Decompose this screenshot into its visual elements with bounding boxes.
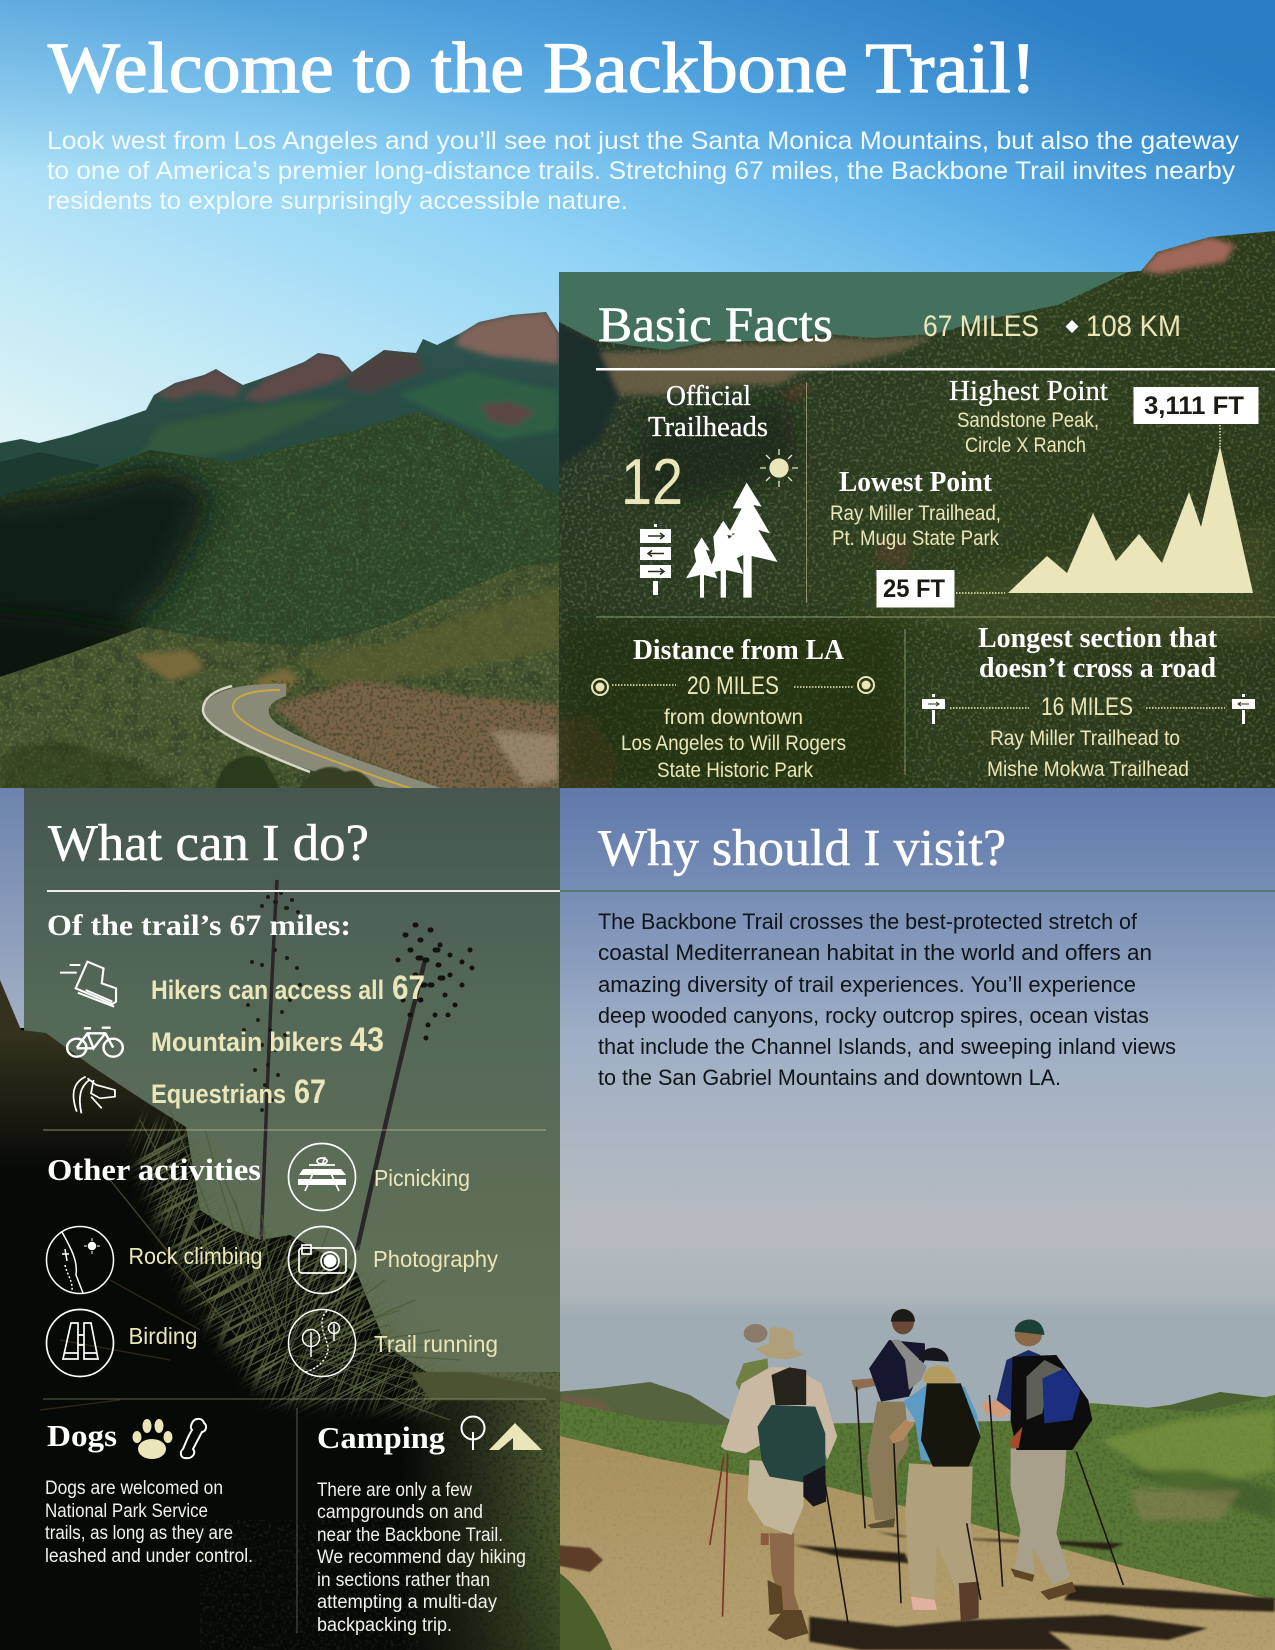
official trailheads: 12 <box>621 445 683 518</box>
hiker 2 <box>867 1402 909 1520</box>
panel: basic facts <box>555 231 1275 791</box>
activity: trail running: Trail running <box>374 1331 498 1357</box>
label: 3,111 ft: 3,111 FT <box>1144 392 1244 420</box>
bottom right grass <box>417 1372 560 1650</box>
icon: bicycle <box>67 1028 123 1057</box>
icon: hiking boot <box>60 962 116 1007</box>
photo: mountain behind facts <box>555 231 1275 791</box>
icon: trail signs <box>640 524 671 595</box>
icon: picnic table <box>288 1144 356 1210</box>
stat: equestrians: Equestrians <box>151 1079 286 1109</box>
elevation chart <box>1008 425 1253 593</box>
stat: length: 67 MILES <box>923 310 1039 343</box>
activity: rock climbing: Rock climbing <box>128 1243 262 1269</box>
photo: mountain and road <box>0 312 559 795</box>
shadows <box>793 1532 1275 1650</box>
stat: length: 108 KM <box>1086 310 1181 343</box>
lowest point: Pt. Mugu State Park <box>832 527 999 550</box>
hiker 1 <box>770 1533 799 1610</box>
subheading: miles: Of the trail’s 67 miles: <box>47 909 351 942</box>
official trailheads: Official <box>666 381 751 412</box>
stat: mountain bikers: Mountain bikers <box>151 1027 343 1057</box>
vertical divider <box>904 629 906 775</box>
distant hill <box>410 1372 560 1400</box>
stat: hikers: 67 <box>392 969 425 1007</box>
distance from LA: from downtown <box>664 706 803 729</box>
icon: sun <box>760 449 798 487</box>
camping section: campgrounds on and <box>317 1502 483 1523</box>
trekking poles <box>825 1387 1123 1623</box>
camping section: Camping <box>317 1420 446 1455</box>
intro paragraph <box>47 127 1240 215</box>
panel: why should I visit <box>560 820 1275 1090</box>
stat: length <box>923 310 1181 343</box>
longest section: doesn’t cross a road <box>979 653 1216 684</box>
icon: right sign <box>1232 694 1255 724</box>
activity: trail running <box>288 1310 498 1376</box>
camping section: near the Backbone Trail. <box>317 1525 503 1546</box>
longest section <box>922 623 1255 781</box>
panel: what can I do <box>0 788 560 1650</box>
faint dark grass speckle <box>200 1520 420 1650</box>
activity: picnicking: Picnicking <box>374 1165 470 1191</box>
panel background: teal sky band <box>559 272 1275 392</box>
divider <box>43 1398 546 1400</box>
icon: trail and trees <box>288 1310 356 1376</box>
activity: photography: Photography <box>373 1246 498 1272</box>
longest section: Mishe Mokwa Trailhead <box>987 758 1189 781</box>
section divider <box>596 616 1275 618</box>
intro paragraph: residents to explore surprisingly accessible nature. <box>47 187 628 215</box>
panel background <box>24 788 560 1650</box>
divider <box>43 1130 546 1131</box>
icon: horse head <box>73 1077 115 1113</box>
icon: paw <box>132 1419 172 1459</box>
activity: birding <box>46 1310 198 1376</box>
intro paragraph: to one of America’s premier long-distance trails. Stretching 67 miles, the Backbone Trail invites nearby <box>47 157 1236 185</box>
hiker: back small <box>736 1358 770 1395</box>
lowest point: Ray Miller Trailhead, <box>830 502 1001 525</box>
camping section <box>317 1416 542 1636</box>
heading: basic facts: Basic Facts <box>598 296 833 352</box>
stat: hikers: Hikers can access all <box>151 975 384 1005</box>
label: 25 ft: 25 FT <box>883 575 945 603</box>
stat: equestrians <box>73 1073 326 1113</box>
body text: deep wooded canyons, rocky outcrop spires, ocean vistas <box>598 1003 1149 1028</box>
icon: rock climber <box>46 1226 114 1294</box>
header rule <box>596 368 1275 370</box>
camping section: backpacking trip. <box>317 1615 452 1636</box>
distance from LA: Los Angeles to Will Rogers <box>621 732 846 755</box>
body text: coastal Mediterranean habitat in the world and offers an <box>598 940 1152 965</box>
icon: binoculars <box>46 1310 114 1376</box>
activity: picnicking <box>288 1144 470 1210</box>
header rule <box>47 890 560 892</box>
icon: tree <box>462 1416 484 1450</box>
dogs section: trails, as long as they are <box>45 1523 233 1544</box>
stat: mountain bikers: 43 <box>350 1021 384 1059</box>
grass blades <box>40 1110 460 1420</box>
camping section: in sections rather than <box>317 1570 490 1591</box>
icon: left sign <box>922 694 945 724</box>
dogs section: National Park Service <box>45 1501 208 1522</box>
bush silhouette <box>0 980 560 1650</box>
distance from LA <box>592 635 874 782</box>
photo: hikers background <box>555 788 1275 1650</box>
lowest point <box>830 467 1001 550</box>
stat: mountain bikers <box>67 1021 384 1059</box>
body text: to the San Gabriel Mountains and downtown LA. <box>598 1065 1061 1090</box>
activity: rock climbing <box>46 1226 262 1294</box>
highest point <box>949 376 1108 457</box>
hiker 3 <box>905 1463 979 1600</box>
title: Welcome to the Backbone Trail! <box>48 28 1036 108</box>
camping section: We recommend day hiking <box>317 1547 526 1568</box>
icon: end target <box>858 677 874 693</box>
icon: start target <box>592 679 608 695</box>
label: 3,111 ft <box>1134 387 1258 424</box>
icon: camera <box>288 1226 356 1294</box>
official trailheads: Trailheads <box>648 412 768 443</box>
illustration: hikers <box>710 1309 1275 1650</box>
distance from LA: State Historic Park <box>657 759 813 782</box>
stat: hikers <box>60 962 425 1007</box>
icon: pine trees <box>686 483 778 598</box>
longest section: Ray Miller Trailhead to <box>990 727 1180 750</box>
vertical divider <box>296 1408 298 1633</box>
activity: photography <box>288 1226 498 1294</box>
sky background <box>0 0 1275 790</box>
body text: amazing diversity of trail experiences. You’ll experience <box>598 972 1136 997</box>
distance from LA: Distance from LA <box>633 635 845 666</box>
body text: The Backbone Trail crosses the best-protected stretch of <box>598 909 1138 934</box>
heading: why should I visit: Why should I visit? <box>598 820 1006 877</box>
stat: equestrians: 67 <box>294 1073 326 1111</box>
vertical divider <box>806 382 807 603</box>
longest section: Longest section that <box>978 623 1218 654</box>
highest point: Sandstone Peak, <box>957 409 1099 432</box>
longest section: 16 MILES <box>1041 693 1133 721</box>
lowest point: Lowest Point <box>839 467 993 498</box>
distance from LA: 20 MILES <box>687 672 779 700</box>
hiker 4 <box>1011 1448 1070 1585</box>
heading: what can I do: What can I do? <box>48 815 369 872</box>
dogs section: leashed and under control. <box>45 1546 253 1567</box>
activity: birding: Birding <box>128 1323 198 1349</box>
highest point: Highest Point <box>949 376 1108 407</box>
icon: bone <box>181 1419 206 1458</box>
subheading: other activities: Other activities <box>47 1152 261 1187</box>
official trailheads <box>621 381 798 598</box>
label: 25 ft <box>876 570 1005 608</box>
camping section: There are only a few <box>317 1480 472 1501</box>
left sky strip <box>0 788 24 1028</box>
dogs section <box>45 1418 253 1567</box>
icon: tent <box>489 1423 542 1450</box>
dogs section: Dogs are welcomed on <box>45 1478 223 1499</box>
camping section: attempting a multi-day <box>317 1592 497 1613</box>
body text: that include the Channel Islands, and sweeping inland views <box>598 1034 1176 1059</box>
body text <box>598 909 1176 1090</box>
header rule <box>560 890 1275 892</box>
agave stalks <box>244 880 472 1250</box>
dogs section: Dogs <box>47 1418 117 1453</box>
intro paragraph: Look west from Los Angeles and you’ll see not just the Santa Monica Mountains, but also the gateway <box>47 127 1240 155</box>
highest point: Circle X Ranch <box>965 434 1086 457</box>
